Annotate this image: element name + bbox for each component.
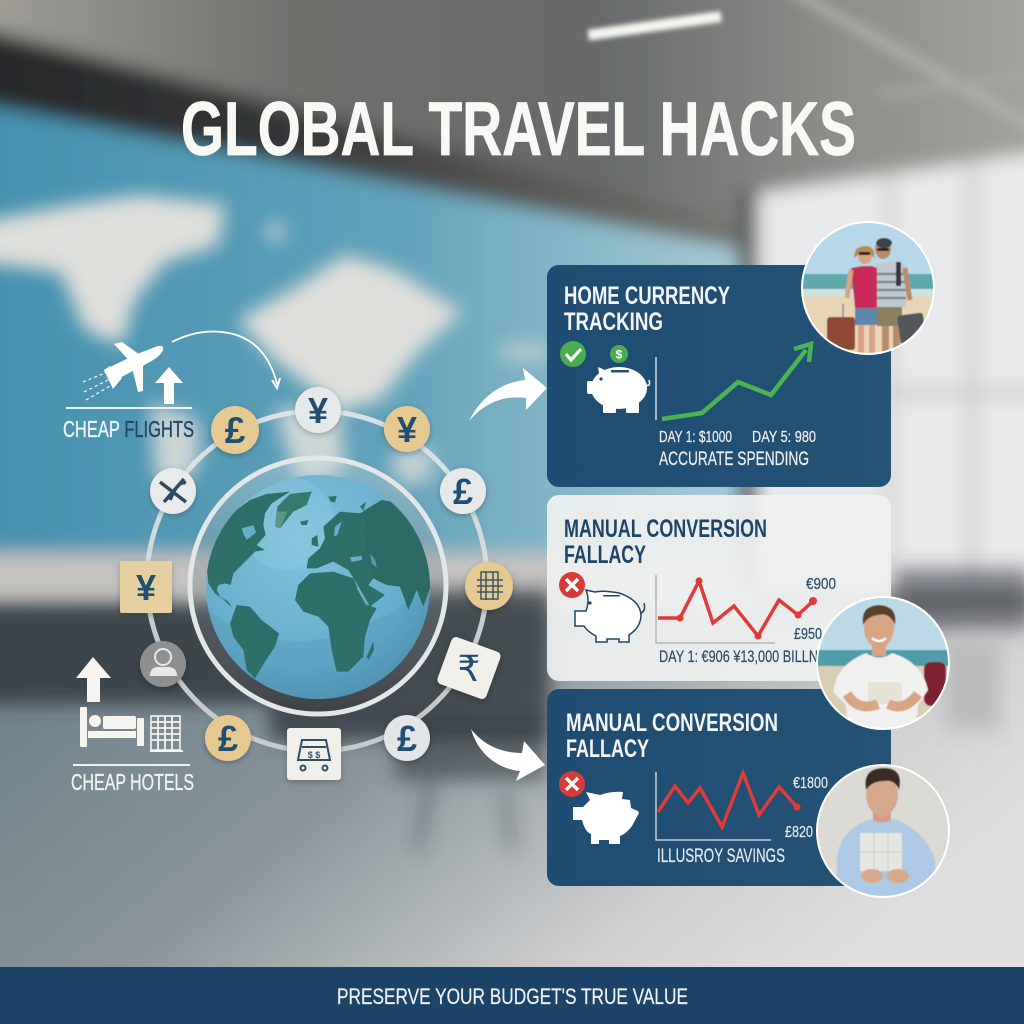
chart labels [659, 429, 816, 470]
heading [564, 282, 730, 336]
coin: yen top-right: ¥ [397, 409, 417, 450]
divider line [66, 407, 192, 409]
chart labels: DAY 1: €906 ¥13,000 BILLN [659, 647, 818, 666]
coin: pound bottom-left: £ [218, 718, 238, 759]
tile: luggage cart [287, 728, 341, 780]
icon: green check [560, 341, 586, 367]
ceiling light and beams [790, 0, 1024, 130]
suitcases [827, 317, 855, 350]
card background [547, 689, 891, 886]
arrow: to home currency card [469, 368, 547, 421]
waiting seats [0, 568, 1024, 850]
icon: hotel building [150, 716, 183, 752]
heading [566, 709, 778, 763]
chart labels: DAY 1: $1000 [659, 429, 732, 446]
photo: couple on beach [800, 220, 936, 357]
globe [206, 475, 432, 703]
heading: MANUAL CONVERSION [566, 709, 778, 737]
panel: cheap flights [63, 342, 194, 442]
tile: luggage cart: $ $ [308, 750, 320, 760]
heading: MANUAL CONVERSION [564, 515, 767, 543]
diagram: globe and currency ring [120, 387, 513, 780]
tile: yen square: ¥ [136, 567, 156, 608]
icon: speed dashes [83, 373, 110, 400]
icon: piggy bank [587, 367, 650, 413]
chart labels: ACCURATE SPENDING [659, 449, 809, 470]
coin: grey traveller [140, 641, 186, 687]
chart labels: €900 [806, 576, 836, 593]
panel: cheap hotels [71, 657, 194, 795]
icon: airplane [104, 342, 163, 392]
chart labels: ILLUSROY SAVINGS [657, 846, 785, 867]
coin: pound bottom-left [205, 715, 251, 761]
photo: smiling man with receipt [815, 596, 951, 736]
inner ring [190, 458, 446, 714]
icon: bed [80, 707, 144, 747]
heading: FALLACY [566, 735, 649, 763]
icon: piggy bank outline [575, 590, 645, 642]
chart: green rising line [656, 344, 811, 420]
arrow: to fallacy card [471, 729, 545, 781]
coin: hotel building [465, 562, 513, 610]
coin: yen top [295, 387, 341, 433]
coin: pound right: £ [453, 471, 473, 512]
card background [547, 495, 891, 681]
coin: pound bottom-right [384, 715, 430, 761]
coin: pound right [440, 468, 486, 514]
man [882, 322, 889, 353]
coin: yen top: ¥ [308, 390, 328, 431]
icon: red cross [559, 572, 585, 598]
arrow: flight path curve [172, 332, 280, 388]
icon: up arrow flights [155, 367, 183, 404]
icon: broken piggy bank [573, 792, 639, 844]
icon: dollar coin [610, 345, 628, 363]
card background [547, 265, 891, 487]
footer banner [0, 967, 1024, 1024]
divider line [73, 764, 190, 766]
coin: plane crossed [150, 468, 196, 514]
wall world map [0, 195, 553, 510]
icon: dollar coin: $ [616, 348, 623, 362]
tile: rupee: ₹ [458, 649, 480, 690]
icon: up arrow hotels [76, 657, 111, 702]
heading: TRACKING [564, 308, 663, 336]
ocean shading [241, 477, 334, 570]
chart labels [659, 576, 836, 666]
chart: volatile red line [656, 772, 800, 840]
panel: home currency tracking [547, 265, 891, 487]
footer banner: PRESERVE YOUR BUDGET'S TRUE VALUE [337, 984, 688, 1009]
panel: manual conversion fallacy light [547, 495, 891, 681]
heading [564, 515, 767, 569]
chart labels: DAY 5: 980 [752, 429, 816, 446]
woman [858, 324, 864, 353]
chart labels: €1800 [793, 775, 828, 792]
coin: pound top-left [211, 406, 259, 454]
tile: rupee [436, 636, 502, 700]
chart labels: £950 [794, 626, 822, 643]
heading: HOME CURRENCY [564, 282, 730, 310]
heading: FALLACY [564, 541, 646, 569]
coin: yen top-right [384, 406, 430, 452]
coin: pound bottom-right: £ [397, 718, 417, 759]
chart: volatile red line [656, 575, 817, 643]
label: cheap hotels: CHEAP HOTELS [71, 769, 194, 795]
icon: red cross [559, 771, 585, 797]
label: cheap flights: CHEAP FLIGHTS [63, 416, 194, 442]
chart labels: £820 [785, 824, 813, 841]
coin: pound top-left: £ [225, 410, 246, 451]
outer ring [147, 411, 487, 751]
photo: puzzled man reading [815, 764, 951, 905]
chart labels [657, 775, 828, 867]
panel: manual conversion fallacy dark [547, 689, 891, 886]
tile: yen square [120, 561, 172, 613]
